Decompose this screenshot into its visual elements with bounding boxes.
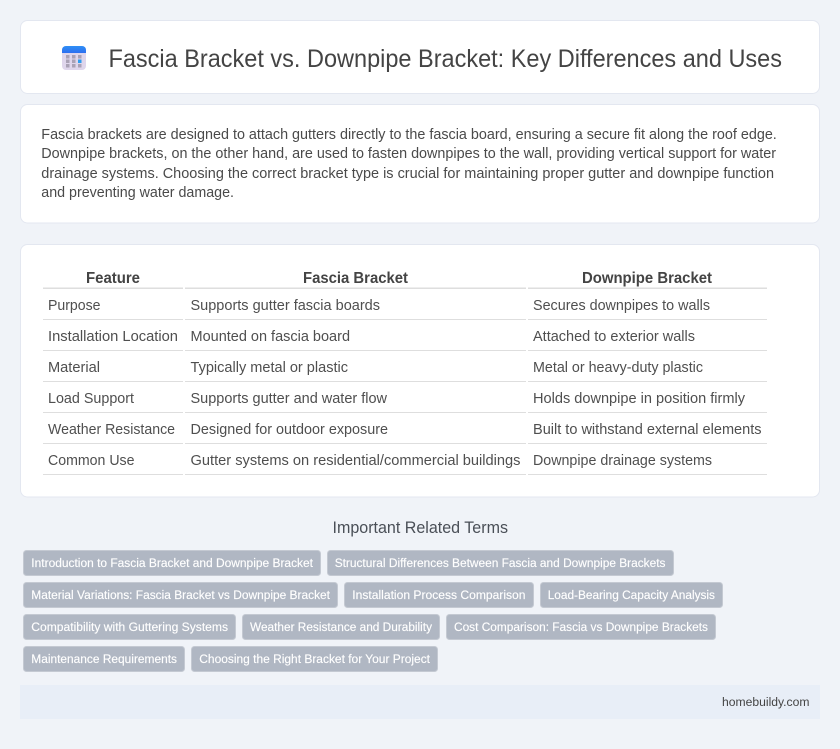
- table row: common use: Gutter systems on residential/commercial buildings: [190, 453, 520, 469]
- text block: introduction paragraph: Downpipe brackets, on the other hand, are used to fasten downpipes to the wall, providing vertical support for water: [41, 146, 776, 162]
- table row: material: Typically metal or plastic: [190, 360, 348, 376]
- tag: Compatibility with Guttering Systems: [31, 620, 228, 634]
- tag: Material Variations: Fascia Bracket vs Downpipe Bracket: [31, 588, 331, 602]
- table row: purpose: [43, 298, 767, 320]
- table row: weather resistance: [43, 422, 767, 444]
- tag: [24, 646, 184, 672]
- panel: introduction: [20, 104, 820, 223]
- table header row: Downpipe Bracket: [582, 270, 712, 287]
- table row: load support: Load Support: [48, 391, 134, 407]
- table row: common use: Downpipe drainage systems: [533, 453, 712, 469]
- table row: weather resistance: Built to withstand external elements: [533, 422, 762, 438]
- panel: header: [20, 20, 820, 94]
- table row: load support: Holds downpipe in position firmly: [533, 391, 746, 407]
- table row: material: [43, 360, 767, 382]
- panel: comparison table: [20, 244, 820, 497]
- tag: Installation Process Comparison: [352, 588, 526, 602]
- text block: introduction paragraph: [41, 127, 777, 201]
- tag: [24, 582, 338, 608]
- table row: installation location: Installation Location: [48, 329, 178, 345]
- table row: weather resistance: Weather Resistance: [48, 422, 175, 438]
- table header row: [43, 270, 767, 289]
- tag: Choosing the Right Bracket for Your Project: [199, 652, 431, 666]
- tag: [540, 582, 722, 608]
- tag: Structural Differences Between Fascia and Downpipe Brackets: [335, 556, 666, 570]
- tag: [242, 614, 440, 640]
- text block: introduction paragraph: drainage systems. Choosing the correct bracket type is crucial for maintaining proper gutter and downpipe function: [41, 166, 774, 182]
- table header row: Feature: [86, 270, 140, 287]
- tag: Load-Bearing Capacity Analysis: [548, 588, 715, 602]
- table row: material: Material: [48, 360, 100, 376]
- table row: weather resistance: Designed for outdoor exposure: [190, 422, 388, 438]
- tag: [344, 582, 534, 608]
- text block: introduction paragraph: Fascia brackets are designed to attach gutters directly to the fascia board, ensuring a secure fit along the roof edge.: [41, 127, 777, 143]
- table header row: Fascia Bracket: [303, 270, 408, 287]
- tag: [192, 646, 438, 672]
- tag: [446, 614, 716, 640]
- footer source text: homebuildy.com: [722, 695, 810, 709]
- title: Fascia Bracket vs. Downpipe Bracket: Key Differences and Uses: [108, 45, 782, 73]
- tag: Maintenance Requirements: [31, 652, 177, 666]
- table row: common use: Common Use: [48, 453, 134, 469]
- tag: Introduction to Fascia Bracket and Downpipe Bracket: [31, 556, 314, 570]
- table row: load support: Supports gutter and water flow: [190, 391, 388, 407]
- tag: [328, 550, 674, 576]
- tag: Cost Comparison: Fascia vs Downpipe Brackets: [454, 620, 708, 634]
- table row: purpose: Supports gutter fascia boards: [190, 298, 380, 314]
- table row: material: Metal or heavy-duty plastic: [533, 360, 703, 376]
- tag: [24, 614, 236, 640]
- table row: installation location: Attached to exterior walls: [533, 329, 695, 345]
- table row: load support: [43, 391, 767, 413]
- table row: installation location: [43, 329, 767, 351]
- table row: purpose: Purpose: [48, 298, 100, 314]
- table row: common use: [43, 453, 767, 475]
- panel: related term tags: [24, 550, 722, 672]
- table row: installation location: Mounted on fascia board: [190, 329, 350, 345]
- tag: Weather Resistance and Durability: [250, 620, 433, 634]
- heading: important related terms: Important Related Terms: [332, 519, 508, 537]
- tag: [24, 550, 320, 576]
- table row: purpose: Secures downpipes to walls: [533, 298, 710, 314]
- icon: calendar: [62, 46, 86, 70]
- text block: introduction paragraph: and preventing water damage.: [41, 185, 234, 201]
- footer: [20, 685, 820, 719]
